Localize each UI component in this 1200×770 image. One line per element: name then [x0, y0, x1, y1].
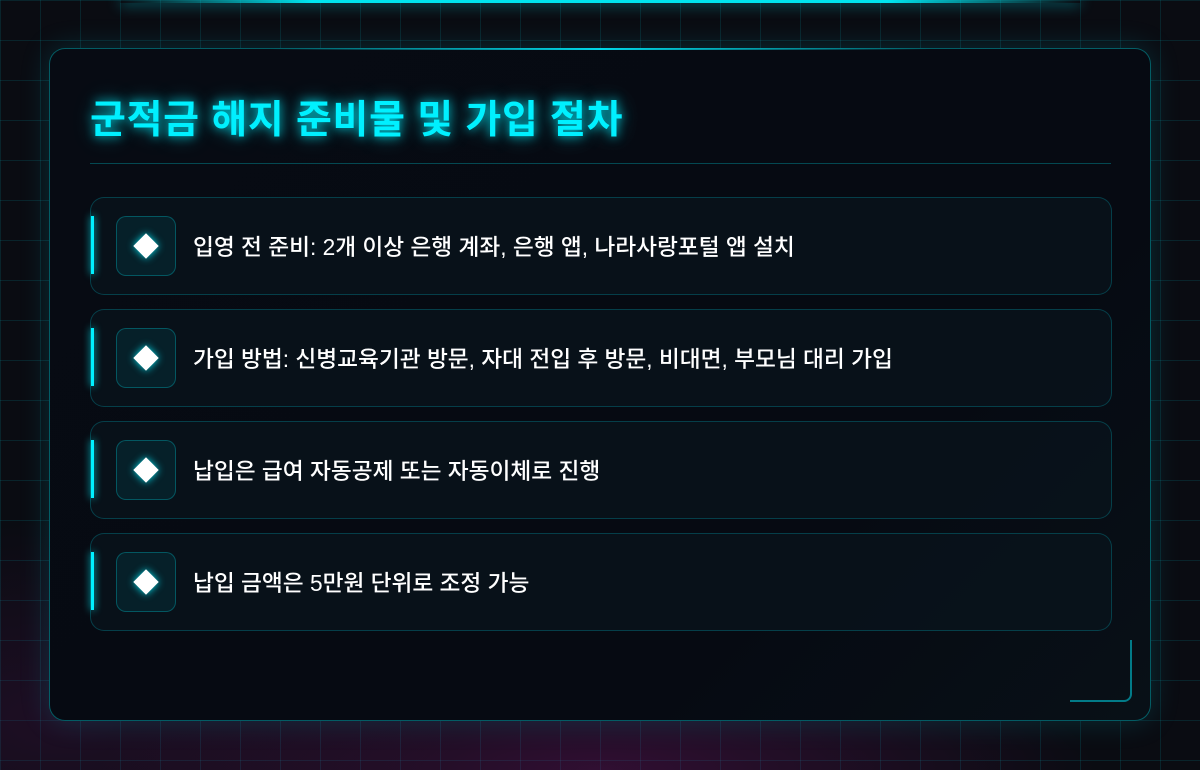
item 1: 입영 전 준비: 2개 이상 은행 계좌, 은행 앱, 나라사랑포털 앱 설치	[193, 234, 795, 260]
item 3	[90, 421, 1112, 519]
top glow line	[120, 0, 1080, 3]
item 2: 가입 방법: 신병교육기관 방문, 자대 전입 후 방문, 비대면, 부모님 대리 가입	[193, 346, 893, 372]
item 1	[90, 197, 1112, 295]
corner bracket	[1070, 640, 1132, 702]
item 4: 납입 금액은 5만원 단위로 조정 가능	[193, 570, 529, 596]
title: 군적금 해지 준비물 및 가입 절차	[90, 99, 623, 142]
item 3: 납입은 급여 자동공제 또는 자동이체로 진행	[193, 458, 600, 484]
item 4	[90, 533, 1112, 631]
item 2	[90, 309, 1112, 407]
